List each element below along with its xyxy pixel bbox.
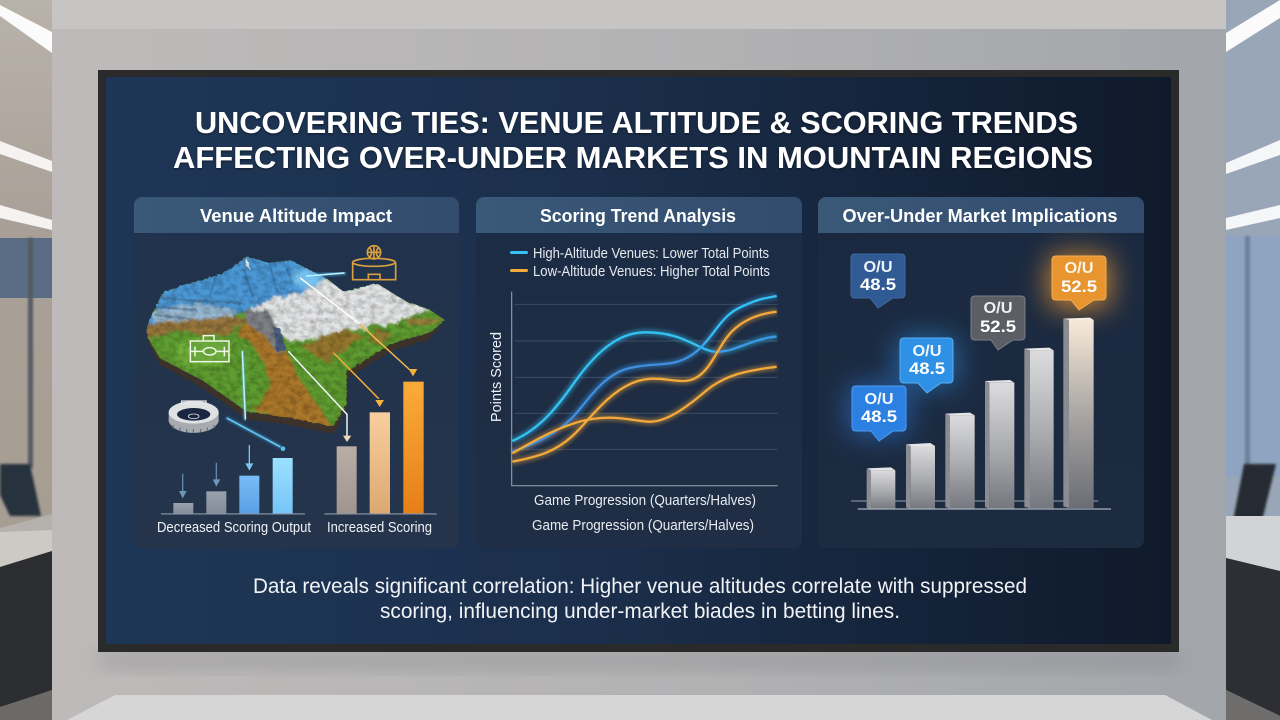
callout: O/U 52.5 grey: O/U (984, 300, 1012, 317)
callout: O/U 48.5 dark blue: 48.5 (860, 275, 896, 294)
callout: O/U 48.5 dark blue: O/U (864, 259, 892, 276)
icon: white stadium (169, 401, 219, 433)
panel header (818, 197, 1144, 233)
screen surface (106, 77, 1171, 644)
room background right (1226, 0, 1280, 720)
y axis label: Points Scored (489, 332, 505, 422)
heading: Venue Altitude Impact (200, 206, 392, 226)
title (173, 105, 1093, 175)
bar chart: decreased scoring (161, 458, 305, 514)
callout: O/U 52.5 orange: 52.5 (1061, 277, 1097, 296)
panel background (818, 197, 1144, 548)
legend (510, 246, 770, 280)
callout: O/U 52.5 orange (1052, 256, 1106, 310)
panel background (476, 197, 802, 548)
icon: gold stadium (353, 246, 396, 280)
callout: O/U 52.5 grey: 52.5 (980, 317, 1016, 336)
legend: High-Altitude Venues: Lower Total Points (533, 246, 769, 262)
heading: Scoring Trend Analysis (540, 206, 736, 226)
panel header (134, 197, 459, 233)
heading: Over-Under Market Implications (842, 206, 1118, 226)
callout: O/U 48.5 bright blue middle (900, 338, 953, 393)
label: increased scoring: Increased Scoring (327, 520, 432, 536)
3D bar chart (851, 318, 1111, 509)
summary text: scoring, influencing under-market biades in betting lines. (380, 600, 900, 623)
desk in foreground (67, 695, 1212, 720)
callout: O/U 48.5 bright blue middle: O/U (912, 343, 942, 360)
panel header (476, 197, 802, 233)
callout: O/U 52.5 grey (971, 296, 1025, 350)
panel: over-under market implications (818, 197, 1144, 548)
legend: Low-Altitude Venues: Higher Total Points (533, 264, 770, 280)
x axis label: Game Progression (Quarters/Halves) (534, 493, 756, 509)
callout: O/U 52.5 orange: O/U (1064, 260, 1094, 277)
panel background (134, 197, 459, 548)
callout: O/U 48.5 dark blue (851, 254, 905, 308)
callout: O/U 48.5 blue lower: 48.5 (861, 407, 897, 426)
callout: O/U 48.5 blue lower (852, 386, 906, 441)
callout: O/U 48.5 bright blue middle: 48.5 (909, 359, 945, 378)
room background left (0, 0, 52, 720)
wall-mounted screen frame (98, 70, 1179, 652)
title: UNCOVERING TIES: VENUE ALTITUDE & SCORING TRENDS (195, 105, 1078, 140)
line chart (512, 292, 778, 486)
bar chart: increased scoring (324, 382, 437, 514)
panel: scoring trend analysis (476, 197, 802, 548)
3D terrain map (140, 252, 450, 438)
icon: football field (190, 336, 229, 362)
summary text (253, 575, 1027, 623)
title: AFFECTING OVER-UNDER MARKETS IN MOUNTAIN REGIONS (173, 140, 1093, 175)
label: decreased scoring output: Decreased Scoring Output (157, 520, 311, 536)
summary text: Data reveals significant correlation: Higher venue altitudes correlate with suppressed (253, 575, 1027, 598)
panel: venue altitude impact (134, 197, 459, 548)
callout: O/U 48.5 blue lower: O/U (864, 391, 894, 408)
callout glows (848, 255, 1110, 435)
x axis label repeated: Game Progression (Quarters/Halves) (532, 518, 754, 534)
arrows from terrain to bars (179, 273, 417, 498)
